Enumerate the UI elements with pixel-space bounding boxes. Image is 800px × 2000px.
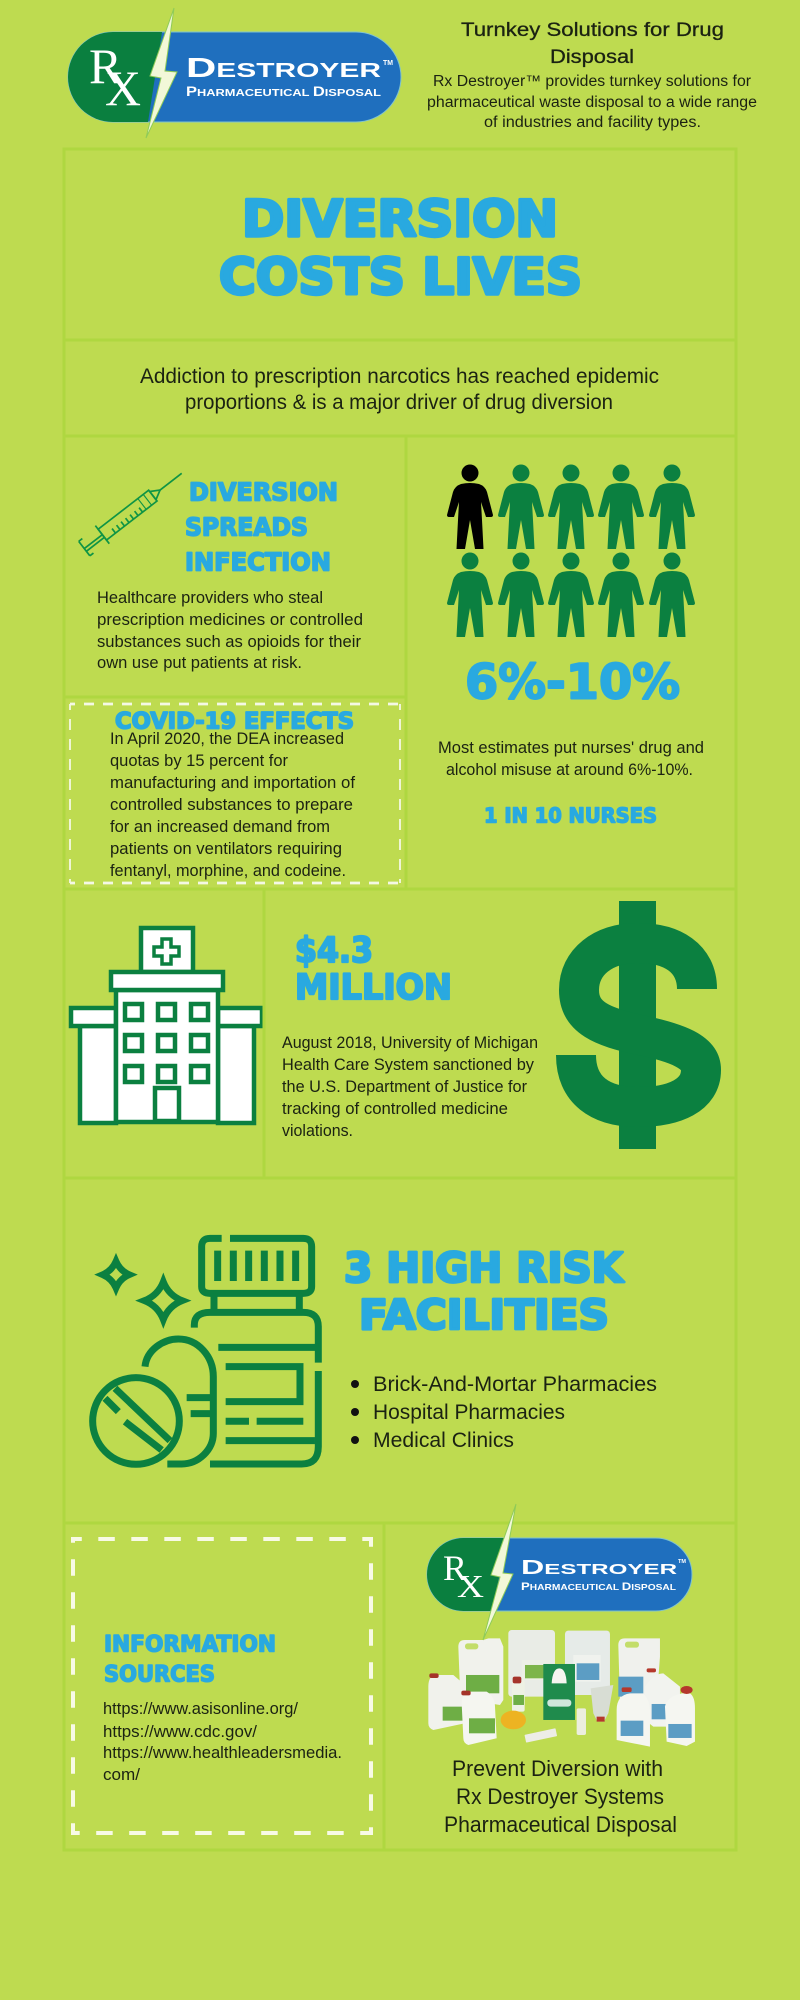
- intro text: proportions & is a major driver of drug diversion: [185, 391, 613, 414]
- source urls: [103, 1700, 342, 1784]
- header description: Rx Destroyer™ provides turnkey solutions for: [433, 73, 751, 90]
- footer logo: R: [443, 1548, 467, 1588]
- icon: syringe: [77, 464, 189, 558]
- heading: information sources: INFORMATION: [104, 1632, 276, 1658]
- intro text: Addiction to prescription narcotics has reached epidemic: [140, 365, 659, 388]
- source urls: https://www.cdc.gov/: [103, 1723, 257, 1741]
- heading: diversion spreads infection: [185, 478, 338, 576]
- panel: title: [64, 149, 736, 340]
- panel: high risk facilities: [64, 1178, 736, 1523]
- panel: information sources: [64, 1523, 384, 1850]
- sanction body text: tracking of controlled medicine: [282, 1100, 508, 1118]
- icon: dollar sign: [576, 901, 701, 1149]
- heading: covid-19 effects: COVID-19 EFFECTS: [115, 708, 354, 734]
- sanction body text: violations.: [282, 1122, 353, 1140]
- heading: 3 high risk facilities: [344, 1244, 625, 1339]
- header description: [427, 73, 757, 131]
- facilities list: Brick-And-Mortar Pharmacies: [373, 1373, 657, 1396]
- heading: $4.3 million: [295, 931, 452, 1008]
- panel: intro statement: [64, 340, 736, 436]
- heading: diversion spreads infection: DIVERSION: [189, 478, 338, 506]
- infection body text: own use put patients at risk.: [97, 654, 302, 672]
- product photo: [428, 1630, 695, 1747]
- footer logo: X: [457, 1568, 484, 1604]
- icon: ten people pictogram: [447, 464, 695, 637]
- closing text: Prevent Diversion with: [452, 1756, 663, 1781]
- header logo: R: [89, 38, 123, 94]
- footer logo: TM: [678, 1559, 686, 1565]
- sanction body text: Health Care System sanctioned by: [282, 1056, 535, 1074]
- source urls: com/: [103, 1766, 140, 1784]
- covid body text: fentanyl, morphine, and codeine.: [110, 862, 346, 880]
- callout: 1 in 10 nurses: 1 IN 10 NURSES: [484, 804, 657, 828]
- header logo: D ESTROYER: [186, 52, 382, 83]
- facilities list: Medical Clinics: [373, 1429, 514, 1452]
- statistic: 6%-10%: 6%-10%: [465, 654, 680, 710]
- icon: pill bottle and tablets: [93, 1238, 318, 1464]
- sanction body text: August 2018, University of Michigan: [282, 1034, 538, 1052]
- icon: hospital: [71, 928, 262, 1123]
- panel: diversion spreads infection: [64, 436, 406, 697]
- header logo: [68, 8, 401, 138]
- header description: pharmaceutical waste disposal to a wide range: [427, 94, 757, 111]
- infection body text: Healthcare providers who steal: [97, 589, 323, 607]
- panel: rx destroyer products: [384, 1504, 736, 1850]
- closing text: Pharmaceutical Disposal: [444, 1812, 677, 1837]
- heading: information sources: SOURCES: [104, 1662, 215, 1688]
- nurses body text: alcohol misuse at around 6%-10%.: [446, 761, 693, 779]
- title: DIVERSION: [242, 190, 558, 248]
- header logo: PHARMACEUTICAL DISPOSAL: [186, 84, 382, 99]
- header heading: Disposal: [550, 47, 634, 68]
- heading: diversion spreads infection: SPREADS: [185, 512, 308, 542]
- sanction body text: [282, 1034, 538, 1140]
- covid body text: manufacturing and importation of: [110, 774, 355, 792]
- facilities list: [351, 1373, 657, 1452]
- covid body text: [110, 730, 355, 880]
- nurses body text: [438, 739, 704, 779]
- dashed frame: [73, 1539, 371, 1833]
- panel: hospital icon: [64, 889, 264, 1178]
- heading: 3 high risk facilities: 3 HIGH RISK: [344, 1244, 625, 1292]
- covid body text: patients on ventilators requiring: [110, 840, 342, 858]
- header description: of industries and facility types.: [484, 114, 701, 131]
- footer logo: PHARMACEUTICAL DISPOSAL: [521, 1581, 676, 1593]
- covid body text: In April 2020, the DEA increased: [110, 730, 344, 748]
- dashed frame: [70, 704, 400, 883]
- nurses body text: Most estimates put nurses' drug and: [438, 739, 704, 757]
- header logo: X: [105, 60, 141, 116]
- panel: covid-19 effects: [64, 697, 406, 889]
- closing text: Rx Destroyer Systems: [456, 1784, 664, 1809]
- source urls: https://www.asisonline.org/: [103, 1700, 298, 1718]
- sanction body text: the U.S. Department of Justice for: [282, 1078, 527, 1096]
- heading: information sources: [104, 1632, 276, 1688]
- header heading: Turnkey Solutions for Drug: [461, 20, 724, 41]
- covid body text: for an increased demand from: [110, 818, 330, 836]
- intro text: [140, 365, 659, 414]
- covid body text: controlled substances to prepare: [110, 796, 353, 814]
- footer logo: [427, 1504, 692, 1640]
- heading: $4.3 million: MILLION: [295, 968, 452, 1008]
- source urls: https://www.healthleadersmedia.: [103, 1744, 342, 1762]
- infection body text: prescription medicines or controlled: [97, 611, 363, 629]
- closing text: [444, 1756, 677, 1837]
- infection body text: substances such as opioids for their: [97, 633, 362, 651]
- header logo: TM: [383, 60, 393, 67]
- panel: $4.3 million sanction: [264, 889, 736, 1178]
- title: [219, 190, 582, 306]
- covid body text: quotas by 15 percent for: [110, 752, 288, 770]
- panel: nurses statistic: [406, 436, 736, 889]
- title: COSTS LIVES: [219, 248, 582, 306]
- header heading: [461, 20, 724, 68]
- footer logo: D ESTROYER: [521, 1557, 677, 1579]
- facilities list: Hospital Pharmacies: [373, 1401, 565, 1424]
- heading: diversion spreads infection: INFECTION: [185, 548, 331, 576]
- heading: $4.3 million: $4.3: [295, 931, 373, 971]
- header text block: [427, 20, 757, 131]
- heading: 3 high risk facilities: FACILITIES: [359, 1291, 609, 1339]
- infection body text: [97, 589, 363, 672]
